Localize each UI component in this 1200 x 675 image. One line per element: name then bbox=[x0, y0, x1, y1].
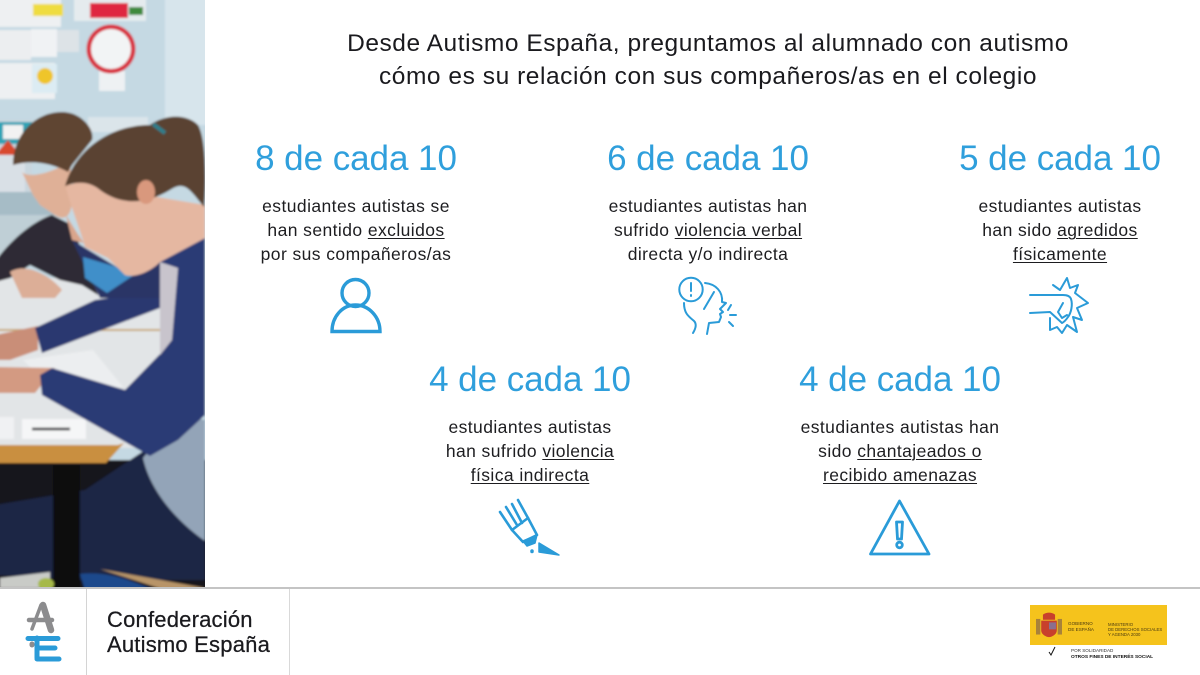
photo: students working in the classroom bbox=[0, 0, 205, 587]
stat: 6 de cada 10 violencia verbal: 6 de cada 10 bbox=[607, 139, 809, 178]
solidarity note: POR SOLIDARIDAD bbox=[1071, 648, 1113, 653]
stat: 4 de cada 10 violencia física indirecta: estudiantes autistas bbox=[448, 417, 612, 437]
stat: 8 de cada 10 excluidos bbox=[255, 139, 457, 264]
stat: 8 de cada 10 excluidos: por sus compañeros/as bbox=[261, 244, 451, 264]
ministry text: GOBIERNO bbox=[1068, 621, 1093, 626]
icon: person bbox=[330, 278, 382, 334]
stat: 4 de cada 10 chantajeados: sido chantajeados o bbox=[818, 441, 982, 461]
stat: 4 de cada 10 chantajeados bbox=[799, 360, 1001, 485]
government logo: DE DERECHOS SOCIALES bbox=[1108, 627, 1162, 632]
icon: check mark bbox=[1048, 646, 1056, 656]
stat: 5 de cada 10 agredidos: físicamente bbox=[1013, 244, 1107, 264]
ministry text: DE ESPAÑA bbox=[1068, 627, 1094, 632]
stat: 5 de cada 10 agredidos: estudiantes autistas bbox=[978, 196, 1142, 216]
boy bbox=[0, 215, 98, 295]
patterned shirt bbox=[160, 262, 178, 355]
icon: head speaking with alert bbox=[678, 276, 737, 335]
stat: 6 de cada 10 violencia verbal: directa y/o indirecta bbox=[628, 244, 788, 264]
stat: 5 de cada 10 agredidos: han sido agredidos bbox=[982, 220, 1138, 240]
hands on the table bbox=[0, 326, 38, 360]
icon: punching fist with impact bbox=[1029, 277, 1089, 334]
stat: 4 de cada 10 violencia física indirecta bbox=[429, 360, 631, 485]
solidarity note: OTROS FINES DE INTERÉS SOCIAL bbox=[1071, 654, 1153, 660]
stat: 6 de cada 10 violencia verbal: sufrido violencia verbal bbox=[614, 220, 802, 240]
girl's hair bbox=[65, 117, 205, 207]
stat: 8 de cada 10 excluidos: han sentido excluidos bbox=[267, 220, 445, 240]
title: cómo es su relación con sus compañeros/as en el colegio bbox=[379, 63, 1037, 90]
icon: coat of arms bbox=[1036, 612, 1062, 638]
footer bbox=[0, 587, 1200, 675]
stat: 4 de cada 10 chantajeados: estudiantes autistas han bbox=[801, 417, 999, 437]
government logo: MINISTERIO bbox=[1108, 622, 1133, 627]
icon: warning triangle bbox=[869, 500, 930, 556]
girl's far arm bbox=[35, 290, 165, 353]
stat: 6 de cada 10 violencia verbal: estudiantes autistas han bbox=[609, 196, 807, 216]
title bbox=[347, 30, 1069, 90]
under the table bbox=[0, 460, 210, 590]
logo text bbox=[106, 607, 270, 657]
icon: broken pen bbox=[498, 498, 560, 556]
stat: 4 de cada 10 chantajeados: 4 de cada 10 bbox=[799, 360, 1001, 399]
stat: 6 de cada 10 violencia verbal bbox=[607, 139, 809, 264]
stat: 4 de cada 10 violencia física indirecta: 4 de cada 10 bbox=[429, 360, 631, 399]
stat: 4 de cada 10 chantajeados: recibido amenazas bbox=[823, 465, 977, 485]
government logo bbox=[1030, 605, 1167, 660]
gray shirt bbox=[143, 415, 205, 541]
title: Desde Autismo España, preguntamos al alumnado con autismo bbox=[347, 30, 1069, 57]
table edge bbox=[0, 443, 124, 463]
table top bbox=[0, 278, 165, 448]
sleeve raised to head bbox=[72, 240, 160, 298]
solidarity note bbox=[1071, 648, 1153, 660]
girl's face and neck bbox=[66, 180, 205, 276]
stat: 8 de cada 10 excluidos: 8 de cada 10 bbox=[255, 139, 457, 178]
stat: 4 de cada 10 violencia física indirecta: han sufrido violencia bbox=[446, 441, 614, 461]
stat: 5 de cada 10 agredidos: 5 de cada 10 bbox=[959, 139, 1161, 178]
stat: 4 de cada 10 violencia física indirecta: física indirecta bbox=[471, 465, 589, 485]
logo text: Confederación bbox=[107, 607, 253, 632]
logo text: Autismo España bbox=[107, 632, 270, 657]
government logo: Y AGENDA 2030 bbox=[1108, 632, 1140, 637]
logo: Autismo España AE mark bbox=[26, 602, 62, 662]
stat: 5 de cada 10 agredidos bbox=[959, 139, 1161, 264]
girl's upper arm and lower arm bbox=[40, 238, 205, 456]
ministry text bbox=[1068, 621, 1094, 632]
stat: 8 de cada 10 excluidos: estudiantes autistas se bbox=[262, 196, 450, 216]
